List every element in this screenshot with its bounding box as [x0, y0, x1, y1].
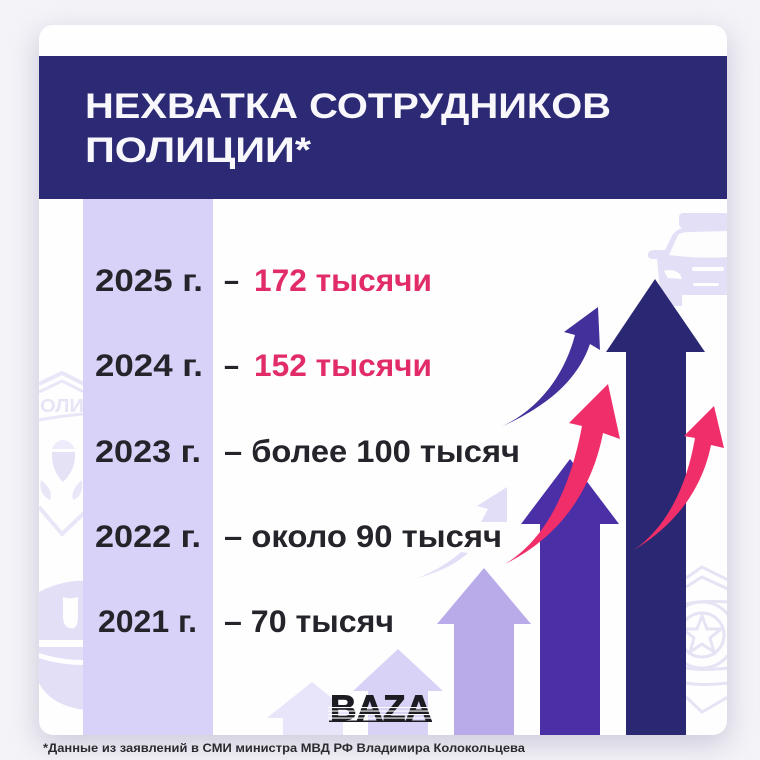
row: 2025: 172 тысячи: [254, 262, 432, 298]
row: 2021: [98, 603, 394, 639]
arrow: lightest bar: [267, 682, 357, 735]
title: ПОЛИЦИИ*: [85, 131, 311, 170]
row: 2021: – 70 тысяч: [224, 603, 394, 639]
row: 2023: – более 100 тысяч: [224, 433, 520, 469]
row: 2022: [95, 518, 502, 554]
header band: [39, 56, 727, 199]
column band: [83, 199, 213, 735]
row: 2024: 2024 г.: [95, 347, 203, 383]
watermark: police car: [648, 213, 729, 306]
row: 2025: –: [224, 262, 239, 298]
row: 2024: –: [224, 347, 239, 383]
curved arrow: pink large: [505, 384, 620, 564]
curved arrow: faint: [418, 487, 507, 578]
curved arrow: pink small: [634, 406, 724, 550]
row: 2024: [95, 347, 432, 383]
watermark: star badge right: [686, 566, 727, 714]
arrow: purple bar: [521, 459, 619, 735]
row: 2023: 2023 г.: [95, 433, 201, 469]
row: 2023: [95, 433, 520, 469]
row: 2025: [95, 262, 432, 298]
logo: BAZA: BAZA: [330, 689, 432, 728]
row: 2021: 2021 г.: [98, 603, 197, 639]
arrow: medium bar: [437, 568, 531, 735]
row: 2022: – около 90 тысяч: [224, 518, 502, 554]
row: 2025: 2025 г.: [95, 262, 203, 298]
watermark: police cap left: [39, 581, 85, 710]
watermark: police badge left: ОЛИ: [40, 396, 84, 416]
title: НЕХВАТКА СОТРУДНИКОВ: [85, 87, 611, 126]
row: 2022: 2022 г.: [95, 518, 201, 554]
arrow: light bar: [353, 649, 443, 735]
row: 2024: 152 тысячи: [254, 347, 432, 383]
title: [85, 87, 611, 170]
watermark: police badge left: [39, 373, 84, 534]
footnote: *Данные из заявлений в СМИ министра МВД РФ Владимира Колокольцева: [43, 743, 526, 755]
arrow: navy bar: [606, 279, 705, 735]
logo: BAZA: [328, 695, 432, 722]
curved arrow: dark purple: [501, 307, 600, 427]
